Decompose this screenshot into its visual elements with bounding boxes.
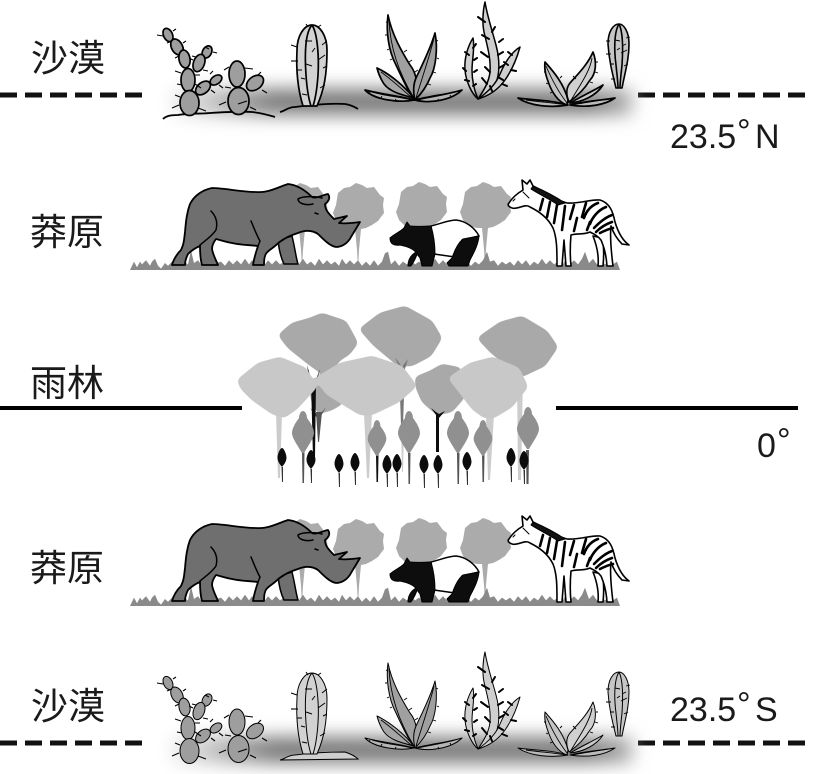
icon: tapir — [390, 556, 479, 602]
back canopy — [278, 306, 558, 414]
icon: rhinoceros — [172, 520, 360, 601]
panel: savanna south — [130, 516, 629, 606]
panel: savanna north — [130, 180, 629, 270]
label: 23.5 N: 23.5 — [670, 118, 736, 156]
grass — [130, 250, 620, 270]
tropic line: south left — [0, 740, 143, 746]
icon: column cactus — [291, 24, 327, 106]
black tree trunk — [431, 408, 445, 452]
middle canopy — [415, 364, 465, 415]
label: 23.5 N: N — [755, 118, 780, 156]
icon: small cactus — [606, 24, 630, 88]
icon: small agave — [518, 52, 615, 106]
understory trees — [292, 407, 539, 484]
label: savanna north: 莽原 — [30, 212, 104, 253]
icon: zebra — [508, 516, 629, 602]
trunks — [276, 357, 523, 480]
label: desert south: 沙漠 — [31, 686, 105, 727]
icon: thorny plant — [463, 2, 520, 99]
ground shadow — [172, 89, 632, 115]
panel: rainforest — [237, 306, 558, 488]
trees — [277, 518, 511, 605]
front canopy — [237, 356, 528, 418]
panel: desert south — [157, 652, 632, 764]
icon: small agave — [518, 702, 615, 756]
label: 23.5 S: S — [755, 691, 778, 729]
ground lines — [163, 104, 358, 119]
sandy ground — [280, 752, 358, 760]
label: 0 degrees: ° — [777, 422, 791, 460]
icon: rhinoceros — [172, 184, 360, 265]
label: 23.5 S: ° — [737, 686, 751, 724]
label: 0 degrees: 0 — [757, 427, 776, 465]
small black saplings — [278, 448, 528, 488]
tropic line: south right — [638, 740, 806, 746]
equator line: right — [556, 406, 798, 410]
ground shadow — [172, 737, 632, 763]
panel: desert north — [157, 2, 632, 119]
icon: small cactus — [606, 672, 630, 736]
label: rainforest: 雨林 — [30, 363, 104, 404]
label: desert north: 沙漠 — [31, 38, 105, 79]
tropic line: north right — [638, 92, 806, 98]
icon: agave — [365, 15, 462, 102]
icon: thorny plant — [463, 652, 520, 749]
equator line: left — [0, 406, 242, 410]
icon: column cactus — [291, 672, 327, 754]
label: 23.5 S: 23.5 — [670, 691, 736, 729]
icon: prickly pear cacti — [157, 675, 267, 764]
icon: tapir — [390, 220, 479, 266]
grass — [130, 586, 620, 606]
label: savanna south: 莽原 — [30, 548, 104, 589]
tropic line: north left — [0, 92, 143, 98]
label: 23.5 N: ° — [737, 113, 751, 151]
trees — [277, 182, 511, 269]
icon: zebra — [508, 180, 629, 266]
icon: agave — [365, 663, 462, 750]
icon: prickly pear cacti — [157, 27, 267, 116]
